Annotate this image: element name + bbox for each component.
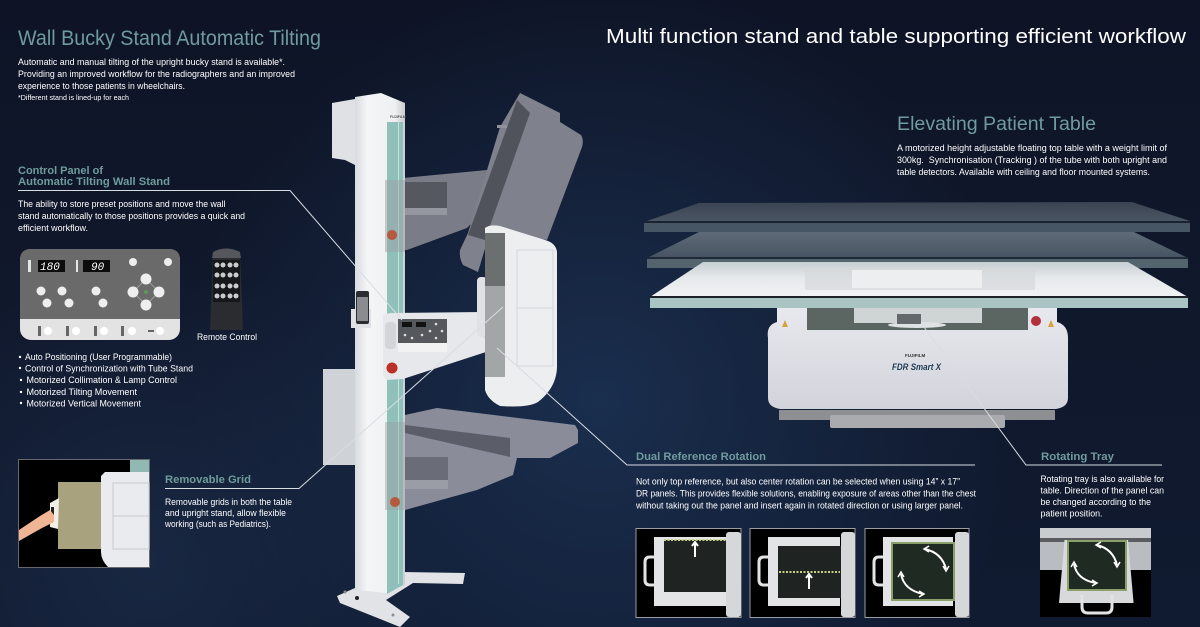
section: control panel	[18, 165, 257, 408]
feature bullet list: Motorized Vertical Movement	[26, 398, 142, 408]
description: Rotating tray is also available for	[1040, 474, 1164, 484]
active arm with control panel	[383, 312, 486, 380]
control panel graphic	[20, 249, 180, 340]
column	[355, 93, 406, 594]
description: A motorized height adjustable floating top table with a weight limit of	[897, 143, 1168, 153]
white glass table top	[650, 262, 1188, 308]
red stop button	[1031, 316, 1041, 326]
translucent ghost overlay on column	[385, 180, 405, 510]
top ghost table glass	[644, 202, 1190, 232]
main title: Multi function stand and table supporting efficient workflow	[606, 26, 1187, 48]
description	[897, 143, 1168, 177]
description: Not only top reference, but also center rotation can be selected when using 14” x 17”	[636, 476, 960, 486]
thumbnail: top reference	[636, 528, 741, 618]
rear box and lower box	[323, 99, 355, 465]
logo text: FUJIFILM	[905, 353, 925, 358]
feature bullet list: Control of Synchronization with Tube Stand	[25, 364, 193, 374]
heading: Wall Bucky Stand Automatic Tilting	[18, 27, 321, 50]
description: table. Direction of the panel can	[1040, 486, 1164, 496]
description: efficient workflow.	[18, 223, 88, 233]
description	[635, 476, 977, 510]
description: Providing an improved workflow for the radiographers and an improved	[18, 69, 295, 79]
description: table detectors. Available with ceiling and floor mounted systems.	[897, 167, 1150, 177]
thumbnail: center reference	[750, 528, 855, 618]
description	[164, 497, 292, 529]
table base	[768, 308, 1068, 428]
description: stand automatically to those positions provides a quick and	[18, 211, 245, 221]
description: Removable grids in both the table	[165, 497, 292, 507]
photo: grid removal	[18, 460, 150, 568]
control panel graphic: 90	[91, 262, 105, 274]
description: be changed according to the	[1040, 497, 1151, 507]
heading: Rotating Tray	[1041, 451, 1115, 463]
feature bullet list	[19, 352, 193, 408]
description	[1040, 474, 1164, 518]
elevating patient table illustration	[644, 202, 1190, 428]
heading: Automatic Tilting Wall Stand	[18, 176, 170, 188]
feature bullet list: Motorized Collimation & Lamp Control	[26, 375, 177, 385]
ghost: tilted upper bucky detector	[398, 93, 583, 272]
active bucky detector	[477, 225, 557, 406]
section: removable grid	[18, 460, 292, 568]
section: elevating patient table	[897, 114, 1168, 177]
description: Automatic and manual tilting of the upright bucky stand is available*.	[18, 57, 285, 67]
thumbnail: rotating tray	[1040, 528, 1151, 617]
leader lines	[18, 190, 1162, 488]
description: *Different stand is lined-up for each	[18, 95, 129, 102]
base plate and foot	[337, 572, 465, 627]
upright wall stand illustration	[323, 93, 583, 627]
description	[18, 57, 295, 102]
heading: Elevating Patient Table	[897, 114, 1096, 135]
description: DR panels. This provides flexible solutions, enabling exposure of areas other than the chest	[636, 488, 977, 498]
thumbnail: rotation	[865, 528, 969, 618]
description: The ability to store preset positions and move the wall	[18, 199, 226, 209]
description: experience to those patients in wheelchairs.	[18, 81, 185, 91]
table base: FDR Smart X	[892, 362, 942, 372]
remote control	[197, 248, 257, 342]
section: dual reference rotation	[635, 451, 977, 618]
description: working (such as Pediatrics).	[164, 519, 271, 529]
section: wall bucky stand automatic tilting	[18, 27, 321, 102]
description	[18, 199, 245, 233]
heading: Removable Grid	[165, 474, 251, 486]
control panel graphic: 180	[40, 262, 60, 274]
remote holder on column	[351, 291, 371, 328]
section: rotating tray	[1040, 451, 1164, 617]
description: 300kg. Synchronisation (Tracking ) of the tube with both upright and	[897, 155, 1167, 165]
description: patient position.	[1040, 508, 1102, 518]
middle ghost table glass	[647, 232, 1188, 268]
column: FUJIFILM	[390, 115, 406, 119]
description: without taking out the panel and insert again in rotated direction or using larger panel.	[635, 500, 963, 510]
remote control: Remote Control	[197, 332, 257, 342]
heading: Control Panel of	[18, 165, 103, 177]
heading: Dual Reference Rotation	[636, 451, 766, 463]
warning labels	[1048, 320, 1054, 327]
description: and upright stand, allow flexible	[165, 508, 286, 518]
feature bullet list: Auto Positioning (User Programmable)	[25, 352, 172, 362]
ghost: lower table position	[402, 408, 578, 510]
feature bullet list: Motorized Tilting Movement	[26, 387, 138, 397]
heading	[18, 165, 170, 188]
